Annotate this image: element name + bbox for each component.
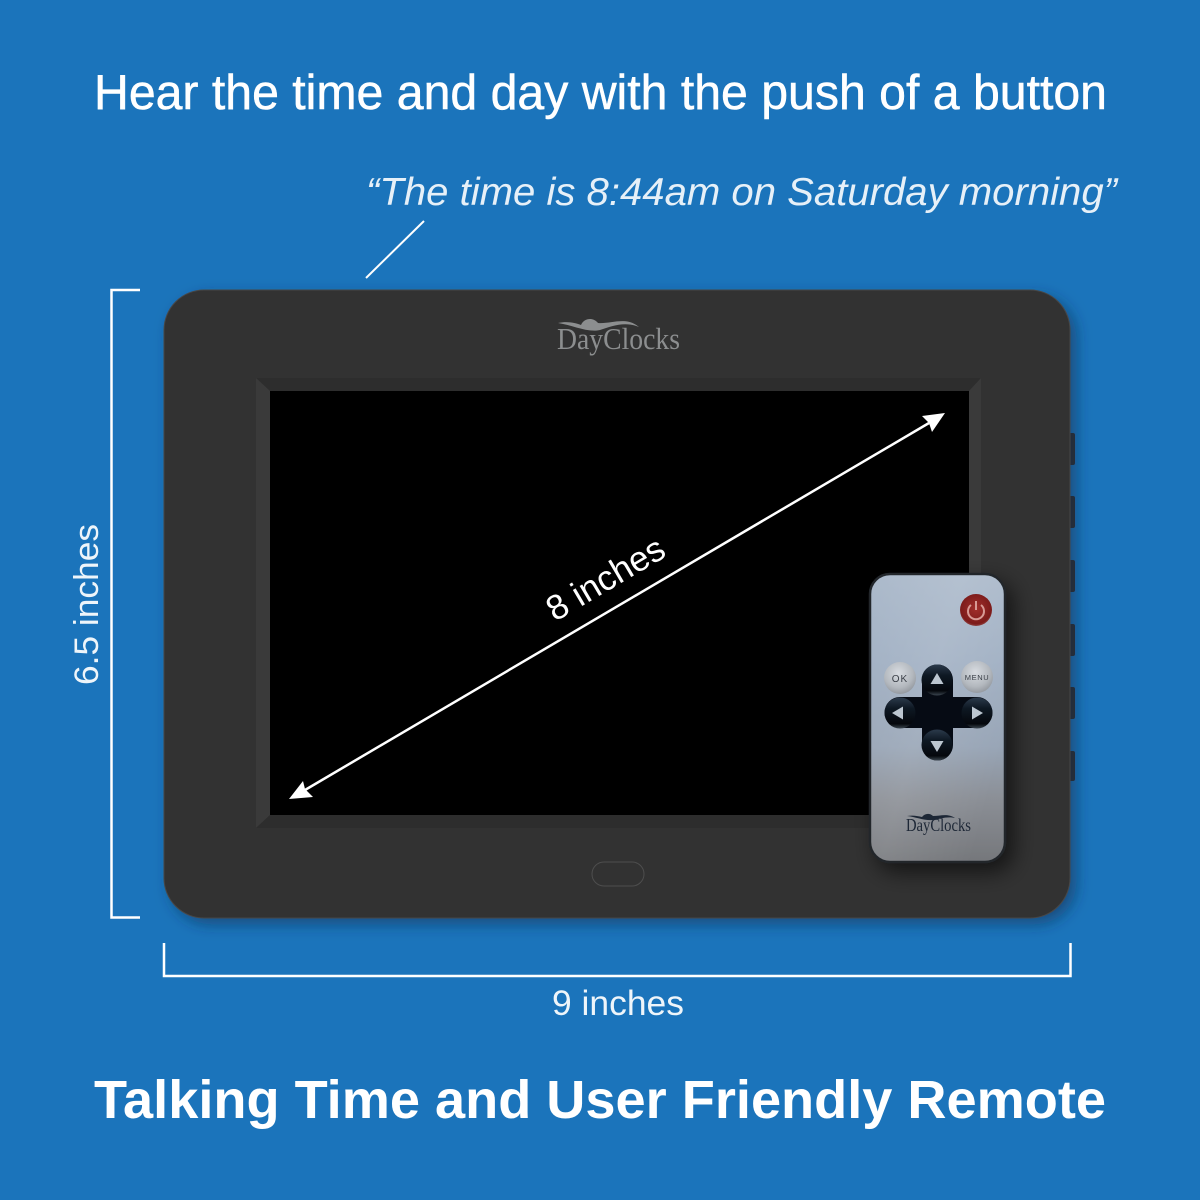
height label: 6.5 inches: [68, 524, 106, 685]
screen bezel: [256, 378, 981, 828]
width label: 9 inches: [552, 984, 684, 1023]
MENU button: MENU: [965, 673, 989, 682]
device frame: [164, 290, 1070, 918]
MENU button: [961, 661, 993, 693]
spoken time quote: “The time is 8:44am on Saturday morning”: [366, 171, 1119, 214]
power button: [960, 594, 992, 626]
OK button: [884, 662, 916, 694]
screen: [270, 391, 969, 815]
DayClocks logo on remote: DayClocks: [906, 815, 971, 835]
diagonal arrow: [289, 413, 945, 799]
bottom heading: Talking Time and User Friendly Remote: [94, 1070, 1106, 1130]
remote control: [870, 574, 1005, 862]
OK button: OK: [892, 674, 908, 685]
digital clock device: [164, 290, 1075, 918]
home button: [592, 862, 644, 886]
remote surface sheen: [871, 575, 1004, 861]
side buttons: [1069, 433, 1075, 781]
directional pad: [884, 664, 992, 760]
height bracket: [112, 290, 140, 918]
title: Hear the time and day with the push of a button: [94, 66, 1107, 120]
DayClocks logo on frame: DayClocks: [557, 321, 680, 356]
remote body: [870, 574, 1005, 862]
callout line: [366, 221, 424, 278]
width bracket: [164, 943, 1070, 976]
diagonal label: 8 inches: [539, 529, 672, 629]
